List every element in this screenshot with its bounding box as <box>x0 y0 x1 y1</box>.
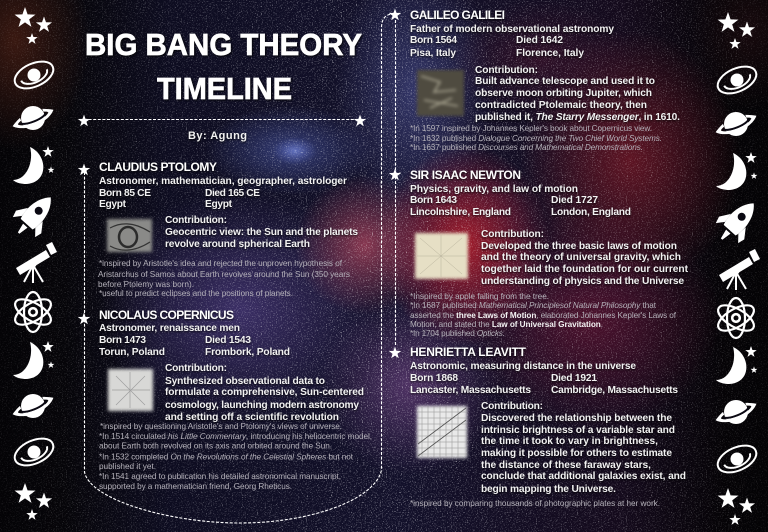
notes: *In 1637 published Discourses and Mathematical Demonstrations. <box>410 143 643 152</box>
contribution text: and the theory of universal gravity, which <box>481 252 681 263</box>
contribution text: Built advance telescope and used it to <box>475 76 655 87</box>
biography facts: Born 1643 <box>410 195 457 206</box>
biography facts: Astronomic, measuring distance in the universe <box>410 361 636 372</box>
notes: published it yet. <box>99 462 156 471</box>
icon: saturn <box>714 111 759 140</box>
notes <box>410 124 662 152</box>
notes: *In 1632 published Dialogue Concerning the Two Chief World Systems. <box>410 134 662 143</box>
biography facts: Born 85 CE <box>99 188 151 199</box>
notes: *inspired by Aristotle's idea and rejected the unproven hypothesis of <box>99 259 343 268</box>
contribution text: intrinsic brightness of a variable star and <box>481 425 675 436</box>
notes: *In 1597 inspired by Johannes Kepler's book about Copernicus view. <box>410 124 652 133</box>
biography facts: Died 165 CE <box>205 188 260 199</box>
contribution text: begin mapping the Universe. <box>481 484 616 495</box>
title divider <box>84 118 360 120</box>
biography facts: Cambridge, Massachusetts <box>551 385 678 396</box>
icon: stars <box>15 483 52 520</box>
notes: *In 1514 circulated his Little Commentary, introducing his heliocentric model, <box>99 432 372 441</box>
contribution text: cosmology, launching modern astronomy <box>165 400 359 411</box>
icon: atom <box>11 292 55 332</box>
icon: moon and stars <box>716 152 757 190</box>
image: geocentric diagram <box>107 219 152 252</box>
contribution text: Contribution: <box>475 65 538 76</box>
contribution text: Contribution: <box>165 363 227 374</box>
notes: *inspired by comparing thousands of photographic plates at her work. <box>410 499 660 508</box>
contribution text: contradicted Ptolemaic theory, then <box>475 100 647 111</box>
notes: about Earth both revolved on its axis and orbited around the Sun. <box>99 442 332 450</box>
biography facts <box>410 184 631 218</box>
icon: stars <box>718 488 755 525</box>
biography facts: Egypt <box>99 199 127 210</box>
contribution text: the time it took to vary in brightness, <box>481 436 658 447</box>
biography facts <box>410 24 614 59</box>
contribution text <box>481 401 686 495</box>
biography facts: Died 1727 <box>551 195 598 206</box>
image: laws of motion diagram <box>415 233 468 279</box>
heading: CLAUDIUS PTOLOMY <box>99 160 217 174</box>
contribution text: understanding of physics and the Universe <box>481 276 684 287</box>
biography facts: Pisa, Italy <box>410 48 456 59</box>
contribution text: Synthesized observational data to <box>165 376 325 387</box>
biography facts: Astronomer, mathematician, geographer, astrologer <box>99 176 347 187</box>
biography facts: Died 1921 <box>551 373 597 384</box>
biography facts: Physics, gravity, and law of motion <box>410 184 578 195</box>
contribution text <box>165 215 358 250</box>
contribution text: making it possible for others to estimate <box>481 448 672 459</box>
notes: *Inspired by apple falling from the tree. <box>410 292 549 301</box>
icon: stars <box>718 12 755 49</box>
notes: *In 1541 agreed to publication his detailed astronomical manuscript, <box>99 472 341 481</box>
panel: Nicolaus Copernicus <box>99 308 372 491</box>
biography facts <box>99 176 347 210</box>
image: period-luminosity graph <box>417 406 467 458</box>
image: heliocentric chart <box>108 369 153 411</box>
icon column: right <box>709 12 766 525</box>
biography facts: Died 1642 <box>516 35 563 46</box>
notes <box>410 292 677 338</box>
title <box>85 27 362 106</box>
dashed timeline frame <box>84 14 392 523</box>
biography facts: Astronomer, renaissance men <box>99 323 240 334</box>
contribution text: Discovered the relationship between the <box>481 413 672 424</box>
contribution text: together laid the foundation for our current <box>481 264 689 275</box>
notes: *In 1687 published Mathematical Principlesof Natural Philosophy that <box>410 301 657 310</box>
contribution text: Contribution: <box>165 215 227 226</box>
notes: *In 1532 completed On the Revolutions of the Celestial Spheres but not <box>99 452 354 462</box>
notes: Motion, and stated the Law of Universal Gravitation. <box>410 320 603 329</box>
notes: Aristarchus of Samos about Earth revolves around the Sun (350 years <box>98 270 350 279</box>
byline: By: Agung <box>188 130 247 142</box>
biography facts: Lancaster, Massachusetts <box>410 385 531 396</box>
contribution text: observe moon orbiting Jupiter, which <box>475 88 652 99</box>
biography facts: Frombork, Poland <box>205 347 290 358</box>
dashed timeline: right column <box>394 20 396 346</box>
notes: *inspired by questioning Aristotle's and Ptolomy's views of universe. <box>100 422 342 431</box>
icon: galaxy <box>714 440 760 478</box>
icon: saturn <box>11 105 56 134</box>
contribution text: Contribution: <box>481 401 543 412</box>
icon: moon and stars <box>716 346 757 384</box>
notes: *useful to predict eclipses and the positions of planets. <box>99 289 293 298</box>
contribution text: published it, The Starry Messenger, in 1610. <box>475 112 680 123</box>
heading: NICOLAUS COPERNICUS <box>99 308 234 322</box>
heading: HENRIETTA LEAVITT <box>410 345 527 359</box>
icon: telescope <box>719 249 760 290</box>
contribution text: formulate a comprehensive, Sun-centered <box>165 387 364 398</box>
icon: moon and stars <box>13 341 54 379</box>
contribution text: conclude that additional galaxies exist, and <box>481 471 686 482</box>
panel: Sir Isaac Newton <box>410 168 689 338</box>
icon: galaxy <box>11 433 57 471</box>
biography facts <box>99 323 290 358</box>
biography facts: Born 1868 <box>410 373 458 384</box>
heading: SIR ISAAC NEWTON <box>410 168 521 182</box>
biography facts: Florence, Italy <box>516 48 584 59</box>
biography facts <box>410 361 678 396</box>
biography facts: Torun, Poland <box>99 347 165 358</box>
panel: Henrietta Leavitt <box>410 345 686 508</box>
contribution text <box>475 65 680 123</box>
contribution text: Contribution: <box>481 229 544 240</box>
contribution text: the distance of these faraway stars, <box>481 460 651 471</box>
biography facts: London, England <box>551 207 631 218</box>
icon: stars <box>15 7 52 44</box>
notes: *In 1704 published Opticks. <box>410 329 505 338</box>
panel: Claudius Ptolomy <box>98 160 358 298</box>
notes <box>99 422 372 491</box>
icon: moon and stars <box>13 146 54 184</box>
title: TIMELINE <box>157 71 292 106</box>
icon: telescope <box>16 242 57 283</box>
contribution text: revolve around spherical Earth <box>165 239 310 250</box>
biography facts: Born 1564 <box>410 35 457 46</box>
contribution text: Geocentric view: the Sun and the planets <box>165 227 358 238</box>
contribution text <box>481 229 689 287</box>
title: BIG BANG THEORY <box>85 27 362 62</box>
icon: rocket <box>6 186 63 244</box>
icon column: left <box>6 7 63 520</box>
icon: galaxy <box>714 61 760 99</box>
biography facts: Egypt <box>205 199 233 210</box>
icon: saturn <box>714 399 759 428</box>
biography facts: Died 1543 <box>205 335 251 346</box>
icon: galaxy <box>11 56 57 94</box>
contribution text: and setting off a scientific revolution <box>165 412 339 423</box>
icon: saturn <box>11 393 56 422</box>
notes: supported by a mathematician friend, Georg Rheticus. <box>99 482 292 491</box>
biography facts: Lincolnshire, England <box>410 207 511 218</box>
icon: rocket <box>709 192 766 250</box>
panel: Galileo Galilei <box>410 8 680 152</box>
biography facts: Father of modern observational astronomy <box>410 24 614 35</box>
heading: GALILEO GALILEI <box>410 8 505 22</box>
notes: asserted the three Laws of Motion, elaborated Johannes Kepler's Laws of <box>410 311 677 320</box>
notes <box>98 259 350 298</box>
icon: atom <box>714 298 758 338</box>
timeline star markers <box>78 8 401 358</box>
contribution text: Developed the three basic laws of motion <box>481 241 677 252</box>
biography facts: Born 1473 <box>99 335 146 346</box>
notes: before Ptolemy was born). <box>98 280 194 289</box>
image: Galileo engraving <box>417 70 464 116</box>
contribution text <box>165 363 364 423</box>
